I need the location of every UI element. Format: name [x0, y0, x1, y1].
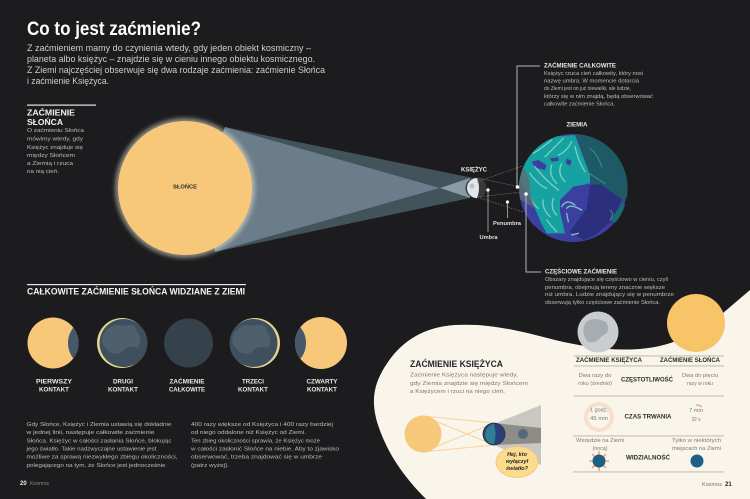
eclipse phase: fourth contact: [295, 317, 347, 392]
lunar eclipse heading and text: [410, 358, 528, 395]
text column right: obserwować, trzeba znajdować się w umbrze: [191, 454, 322, 460]
row: visibility: WIDZIALNOŚĆ: [626, 452, 670, 462]
intro text: [27, 43, 326, 86]
eclipse phase: first contact: PIERWSZY: [36, 378, 73, 386]
section: solar eclipse description: SŁOŃCA: [27, 117, 63, 127]
text column left: polegającego na tym, że Słońce jest jednocześnie: [26, 463, 166, 469]
callout: total eclipse: nazwę umbra. W momencie dotarcia: [544, 78, 640, 84]
callout: penumbra: [493, 200, 522, 227]
shadow cone: [200, 127, 473, 252]
callout: total eclipse: do Ziemi jest on już niewielki, ale ludzie,: [544, 86, 631, 92]
callout: total eclipse: ZAĆMIENIE CAŁKOWITE: [544, 60, 616, 70]
intro text: i zaćmienie Księżyca.: [27, 76, 109, 86]
page number right: Kosmos: [702, 482, 722, 488]
indigo seas: [520, 157, 572, 228]
intro text: Z zaćmieniem mamy do czynienia wtedy, gdy jeden obiekt kosmiczny –: [27, 43, 312, 53]
lunar eclipse diagram: [404, 405, 541, 478]
section: solar eclipse description: a Ziemią i rzuca: [27, 161, 74, 167]
page number left: 20: [20, 481, 27, 487]
callout: partial eclipse: CZĘŚCIOWE ZAĆMIENIE: [545, 266, 617, 276]
callout: total eclipse: Księżyc rzuca cień całkowity, który nosi: [544, 71, 643, 77]
page number left: [20, 481, 49, 487]
teal land: [517, 135, 590, 233]
text column right: (patrz wyżej).: [191, 463, 230, 469]
section: solar eclipse description: na nią cień.: [27, 169, 60, 175]
text column right: Ten zbieg okoliczności sprawia, że Księżyc może: [191, 438, 320, 444]
callout: partial eclipse: penumbra, obejmują tereny znacznie większe: [545, 285, 665, 291]
row: frequency: Dwa razy do: [578, 373, 612, 379]
callout: partial eclipse: obserwują tylko częściowe zaćmienie Słońca.: [545, 300, 660, 306]
section: solar eclipse description: O zaćmieniu Słońca: [27, 128, 85, 134]
row: duration: [586, 404, 703, 430]
eclipse phase: third contact: KONTAKT: [238, 386, 268, 394]
callout: total eclipse: [516, 60, 653, 189]
page number right: [702, 482, 732, 488]
row: duration: 7 min: [689, 408, 703, 414]
text column left: Gdy Słońce, Księżyc i Ziemia ustawią się dokładnie: [26, 422, 172, 428]
eclipse phase: totality: [164, 318, 213, 394]
text column right: 400 razy większe od Księżyca i 400 razy bardziej: [191, 422, 333, 428]
row: duration: 1 godz.: [590, 408, 608, 414]
callout: partial eclipse: niż umbra. Ludzie znajdujący się w penumbrze: [545, 292, 674, 298]
text column left: [25, 422, 178, 469]
row: visibility: Wszędzie na Ziemi: [576, 438, 624, 444]
eclipse phase: fourth contact: CZWARTY: [306, 378, 338, 386]
haze on the left limb: [519, 168, 535, 208]
eclipse phase: second contact: DRUGI: [113, 378, 133, 386]
text column right: [190, 422, 339, 469]
row: visibility: (nocą): [592, 446, 608, 452]
eclipse phase: totality: ZAĆMIENIE: [170, 376, 204, 386]
callout: penumbra: Penumbra: [493, 221, 522, 227]
moon: [461, 166, 487, 198]
moon illustration: [578, 312, 618, 352]
callout: umbra: [480, 188, 498, 241]
row: frequency: CZĘSTOTLIWOŚĆ: [621, 374, 673, 384]
eclipse phase: fourth contact: KONTAKT: [307, 386, 337, 394]
section: solar eclipse description: mówimy wtedy, gdy: [27, 136, 83, 142]
page number left: Kosmos: [30, 481, 49, 487]
lunar eclipse heading and text: Zaćmienie Księżyca następuje wtedy,: [410, 372, 519, 378]
callout: total eclipse: całkowite zaćmienie Słońca.: [544, 102, 615, 108]
callout: partial eclipse: Obszary znajdujące się częściowo w cieniu, czyli: [545, 277, 668, 283]
title: Co to jest zaćmienie?: [27, 19, 201, 40]
text column right: w całości zasłonić Słońce na niebie. Aby to zjawisko: [190, 446, 339, 452]
eclipse phase: second contact: KONTAKT: [108, 386, 138, 394]
row: duration: CZAS TRWANIA: [624, 414, 672, 420]
row: visibility: miejscach na Ziemi: [672, 446, 721, 452]
lunar eclipse heading and text: a Księżycem i rzuci na niego cień.: [410, 389, 506, 395]
intro text: Z Ziemi najczęściej obserwuje się dwa rodzaje zaćmienia: zaćmienie Słońca: [27, 65, 326, 75]
row: duration: 45 min: [590, 416, 608, 422]
callout: umbra: Umbra: [480, 235, 498, 241]
row: visibility: [576, 438, 721, 471]
heading: total eclipse from Earth: CAŁKOWITE ZAĆMIENIE SŁOŃCA WIDZIANE Z ZIEMI: [27, 286, 245, 298]
swirl lines: [530, 138, 585, 235]
eclipse phase: third contact: TRZECI: [242, 378, 264, 386]
eclipse phase: first contact: KONTAKT: [39, 386, 69, 394]
cream background panel: [374, 290, 750, 499]
row: frequency: razy w roku: [687, 381, 713, 387]
earth: ZIEMIA: [566, 122, 588, 128]
eclipse phase: totality: CAŁKOWITE: [169, 386, 205, 394]
comparison table: [573, 355, 724, 472]
sun illustration: [667, 294, 725, 352]
earth: [513, 122, 630, 242]
dark hemisphere: [575, 132, 630, 200]
speech bubble: światło?: [506, 466, 529, 472]
row: frequency: roku (średnio): [578, 381, 612, 387]
text column left: możliwe za sprawą niezwykłego zbiegu okoliczności,: [26, 454, 178, 460]
section: solar eclipse description: ZAĆMIENIE: [27, 106, 75, 118]
speech bubble: wyłączył: [506, 459, 529, 465]
lunar eclipse heading and text: ZAĆMIENIE KSIĘŻYCA: [410, 358, 503, 369]
intro text: planeta albo księżyc – znajdzie się w cieniu innego obiektu kosmicznego.: [27, 54, 315, 64]
section: solar eclipse description: [27, 104, 96, 175]
speech bubble: [496, 446, 538, 478]
lunar eclipse heading and text: gdy Ziemia znajdzie się między Słońcem: [410, 381, 528, 387]
section: solar eclipse description: między Słońcem: [27, 153, 75, 159]
eclipse phase: second contact: [97, 318, 148, 394]
text column left: jego światło. Takie nadzwyczajne ustawienie jest: [25, 446, 157, 452]
callout: total eclipse: którzy się w nim znajdą, będą obserwować: [544, 94, 653, 100]
moon: KSIĘŻYC: [461, 166, 487, 174]
row: frequency: Dwa do pięciu: [682, 373, 718, 379]
comparison table: ZAĆMIENIE SŁOŃCA: [660, 355, 720, 364]
text column right: od niego oddalone niż Księżyc od Ziemi.: [191, 430, 307, 436]
text column left: Słońca. Księżyc w całości zasłania Słońce, blokując: [26, 438, 172, 444]
eclipse phase: third contact: [230, 318, 280, 394]
section: solar eclipse description: Księżyc znajduje się: [27, 145, 83, 151]
text column left: w jednej linii, następuje całkowite zaćmienie: [25, 430, 155, 436]
comparison table: ZAĆMIENIE KSIĘŻYCA: [576, 355, 642, 364]
callout: partial eclipse: [524, 192, 674, 306]
eclipse phase: first contact: [28, 318, 78, 392]
speech bubble: Hej, kto: [507, 452, 528, 458]
shadow projection lines: [477, 166, 523, 212]
row: duration: 32 s: [692, 417, 701, 423]
page number right: 21: [725, 482, 732, 488]
row: visibility: Tylko w niektórych: [672, 438, 721, 444]
row: frequency: [578, 373, 718, 387]
sun: SŁOŃCE: [173, 182, 197, 190]
sun: [115, 118, 255, 258]
